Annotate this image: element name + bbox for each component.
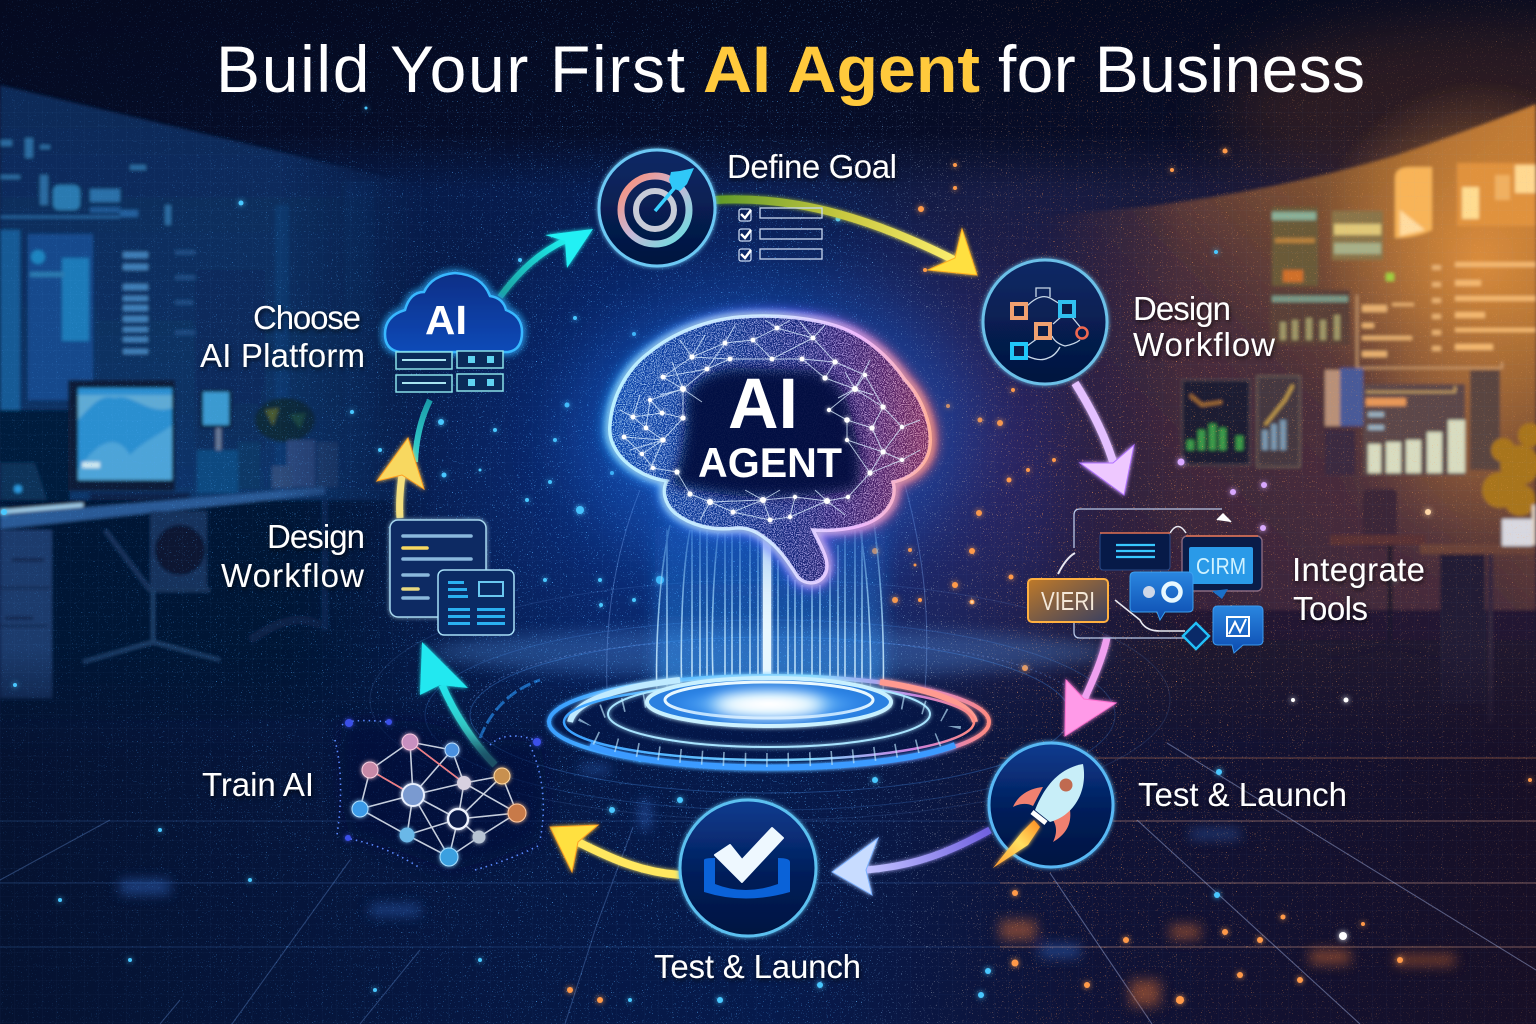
step: design workflow document icon	[390, 520, 514, 635]
step: define goal icon	[599, 150, 715, 266]
arrow: integrate tools to test and launch	[1065, 638, 1116, 736]
arrow: choose AI platform to define goal	[500, 229, 593, 297]
label: choose AI platform: Choose	[253, 299, 361, 336]
background: blurred floor lights	[120, 765, 1455, 1006]
arrow: define goal to design workflow	[715, 199, 977, 275]
title: AI Agent	[703, 32, 980, 106]
step: choose AI platform cloud icon: AI	[425, 297, 467, 343]
hologram: concentric rings	[549, 676, 989, 768]
label: design workflow right	[1133, 290, 1275, 363]
icon: workflow nodes	[1012, 288, 1088, 360]
arrow: design workflow to integrate tools	[1075, 383, 1134, 495]
hologram: light beams	[607, 485, 927, 705]
label: design workflow right: Workflow	[1133, 326, 1275, 363]
step: final check icon	[680, 800, 816, 936]
tool icon: diamond	[1183, 623, 1209, 649]
background: blurred left office	[0, 84, 388, 704]
title: for Business	[998, 32, 1365, 106]
label: design workflow left: Workflow	[221, 557, 364, 594]
background: hologram floor glow arcs	[370, 580, 1170, 820]
label: test and launch bottom: Test & Launch	[654, 948, 861, 985]
icon: target	[621, 168, 694, 244]
label: train AI: Train AI	[202, 766, 314, 803]
label: design workflow right: Design	[1133, 290, 1231, 327]
arrow: train AI to design workflow	[420, 642, 495, 765]
icon: check in tray	[704, 828, 790, 898]
step: train AI network	[335, 719, 546, 870]
central brain: AI Agent	[565, 280, 975, 590]
label: choose AI platform	[200, 299, 365, 374]
title: Build Your First	[216, 32, 685, 106]
tool card: VIERI: VIERI	[1041, 586, 1095, 616]
step: choose AI platform cloud icon	[385, 273, 522, 392]
background: blurred right office	[1066, 90, 1536, 696]
label: define goal: Define Goal	[727, 148, 897, 185]
brain text: AI: AI	[728, 365, 798, 444]
arrow: final check to train AI	[550, 825, 680, 875]
label: design workflow left	[221, 518, 365, 594]
arrow: design workflow to choose AI platform	[377, 438, 424, 518]
label: integrate tools	[1292, 551, 1425, 627]
tool card: CIRM	[1182, 536, 1262, 599]
icon: rocket	[993, 764, 1084, 868]
label: design workflow left: Design	[267, 518, 365, 555]
step: integrate tools icon group	[1028, 509, 1263, 653]
label: integrate tools: Integrate	[1292, 551, 1425, 588]
title	[216, 32, 1365, 106]
background: floor	[0, 640, 1536, 1024]
background: perspective floor grid	[0, 743, 1536, 1024]
tool card: VIERI	[1028, 579, 1108, 622]
tool card: chart bubble	[1213, 606, 1263, 653]
label: test and launch right: Test & Launch	[1138, 776, 1347, 813]
tool card: CIRM: CIRM	[1196, 553, 1246, 579]
step: test and launch rocket	[989, 743, 1113, 868]
label: choose AI platform: AI Platform	[200, 337, 365, 374]
tool card: brain bubble	[1130, 572, 1193, 620]
step: design workflow icon	[983, 260, 1107, 384]
arrow: test and launch to final check	[832, 830, 990, 895]
label: integrate tools: Tools	[1293, 590, 1368, 627]
checklist	[739, 208, 822, 261]
brain neural web	[620, 320, 920, 522]
tool card: list	[1100, 533, 1170, 570]
brain text: AGENT: AGENT	[698, 439, 842, 486]
arrow: choose platform back-link teal	[415, 400, 430, 462]
server rack	[396, 351, 503, 392]
